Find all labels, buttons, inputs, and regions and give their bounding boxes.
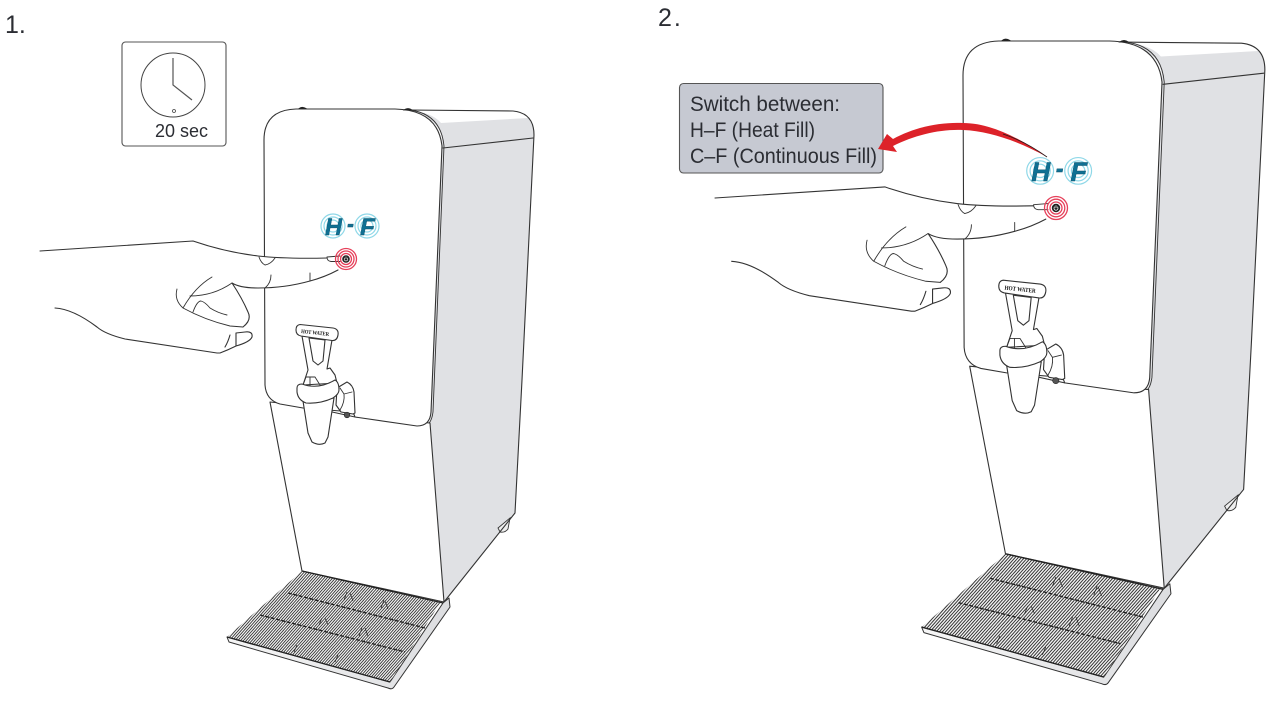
step number 1: 1. bbox=[5, 11, 26, 39]
callout: switch between modes bbox=[680, 84, 883, 173]
H-F display: H bbox=[1031, 157, 1051, 187]
front panel bbox=[963, 41, 1162, 393]
tap: HOT WATER bbox=[1004, 286, 1036, 295]
side seam bbox=[1163, 73, 1264, 84]
H-F display bbox=[321, 211, 379, 241]
hand, step 2 bbox=[715, 187, 1050, 311]
timer box: 20 sec: 20 sec bbox=[155, 121, 208, 141]
water boiler, step 2 bbox=[922, 39, 1265, 685]
foot bbox=[1225, 495, 1238, 511]
top of cabinet bbox=[1003, 41, 1258, 57]
cabinet outline bbox=[1003, 41, 1265, 588]
callout: switch between modes: C–F (Continuous Fill) bbox=[690, 145, 877, 168]
front panel bbox=[264, 109, 442, 426]
tap bbox=[999, 280, 1065, 413]
water boiler, step 1 bbox=[40, 107, 534, 689]
foot bbox=[498, 518, 510, 532]
H-F display: - bbox=[347, 211, 354, 238]
step number 2: 2. bbox=[658, 4, 683, 32]
tray bbox=[227, 571, 450, 689]
power button bbox=[336, 248, 356, 270]
H-F display: F bbox=[1070, 157, 1088, 187]
tray bbox=[922, 554, 1171, 685]
side panel bbox=[300, 109, 534, 602]
panel double edge bbox=[1126, 42, 1164, 390]
side seam bbox=[443, 138, 533, 148]
lower front body bbox=[970, 366, 1164, 588]
tap: HOT WATER bbox=[301, 329, 330, 338]
H-F display: F bbox=[360, 214, 376, 241]
callout: switch between modes: Switch between: bbox=[690, 93, 840, 116]
top of cabinet bbox=[300, 109, 528, 123]
tap bbox=[296, 324, 355, 444]
top bumps bbox=[1002, 39, 1128, 42]
top bumps bbox=[299, 107, 412, 110]
power button, step 2 bbox=[1044, 196, 1068, 220]
H-F display: H bbox=[325, 214, 343, 241]
cabinet outline bbox=[300, 109, 534, 602]
lower front body bbox=[270, 402, 444, 602]
H-F display: - bbox=[1056, 154, 1064, 183]
timer box: 20 sec bbox=[122, 42, 226, 146]
panel double edge bbox=[410, 110, 444, 423]
callout: switch between modes: H–F (Heat Fill) bbox=[690, 119, 815, 142]
hand bbox=[40, 241, 342, 353]
arrow: from H-F display to callout bbox=[878, 123, 1047, 157]
side panel bbox=[1003, 41, 1265, 588]
H-F display bbox=[1027, 154, 1092, 187]
